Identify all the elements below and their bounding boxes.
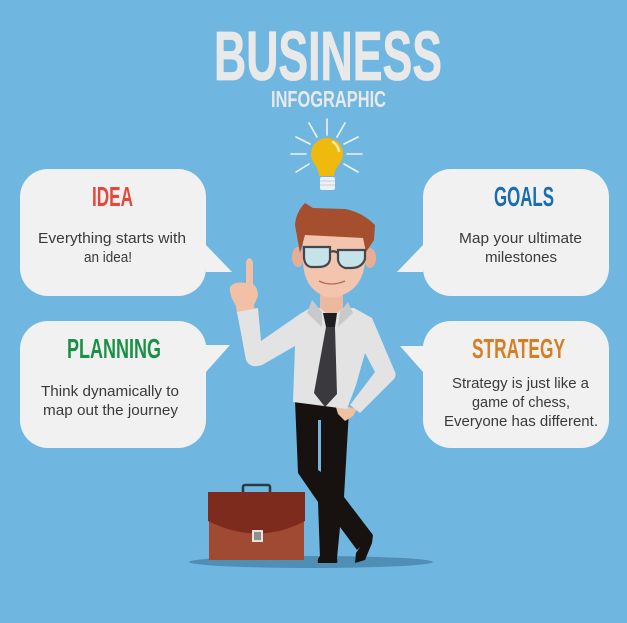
- panel: planning: [20, 321, 230, 448]
- panel: idea: [20, 169, 232, 296]
- panel: strategy: game of chess,: [472, 395, 570, 411]
- icon: briefcase: [208, 485, 305, 560]
- panel: goals: milestones: [485, 250, 557, 266]
- panel: planning: PLANNING: [67, 333, 161, 364]
- gap between legs: [318, 420, 321, 472]
- neck: [320, 290, 343, 318]
- tie: [314, 313, 337, 407]
- panel: planning: map out the journey: [43, 403, 179, 419]
- title: [214, 17, 442, 112]
- panel: strategy: [400, 321, 609, 448]
- title: BUSINESS: [214, 17, 442, 95]
- smile: [319, 281, 345, 284]
- glasses: [304, 247, 365, 268]
- icon: light bulb: [291, 119, 362, 190]
- raised hand: [230, 258, 258, 314]
- hair: [295, 203, 375, 253]
- ears: [292, 247, 376, 268]
- panel: idea: an idea!: [84, 250, 132, 266]
- trousers and shoes: [295, 400, 373, 563]
- panel: goals: GOALS: [494, 181, 554, 212]
- panel: planning: Think dynamically to: [41, 384, 179, 400]
- title: INFOGRAPHIC: [271, 86, 386, 112]
- panel: goals: Map your ultimate: [459, 231, 582, 247]
- businessman: [230, 203, 396, 563]
- collar: [307, 300, 353, 327]
- panel: strategy: Strategy is just like a: [452, 376, 590, 392]
- panel: idea: Everything starts with: [38, 231, 186, 247]
- shirt: [237, 308, 396, 413]
- face: [303, 235, 365, 298]
- panel: goals: [397, 169, 609, 296]
- hand in pocket: [335, 404, 357, 421]
- panel: strategy: Everyone has different.: [444, 414, 598, 430]
- panel: idea: IDEA: [92, 181, 133, 212]
- panel: strategy: STRATEGY: [472, 333, 565, 364]
- ground shadow: [189, 556, 433, 568]
